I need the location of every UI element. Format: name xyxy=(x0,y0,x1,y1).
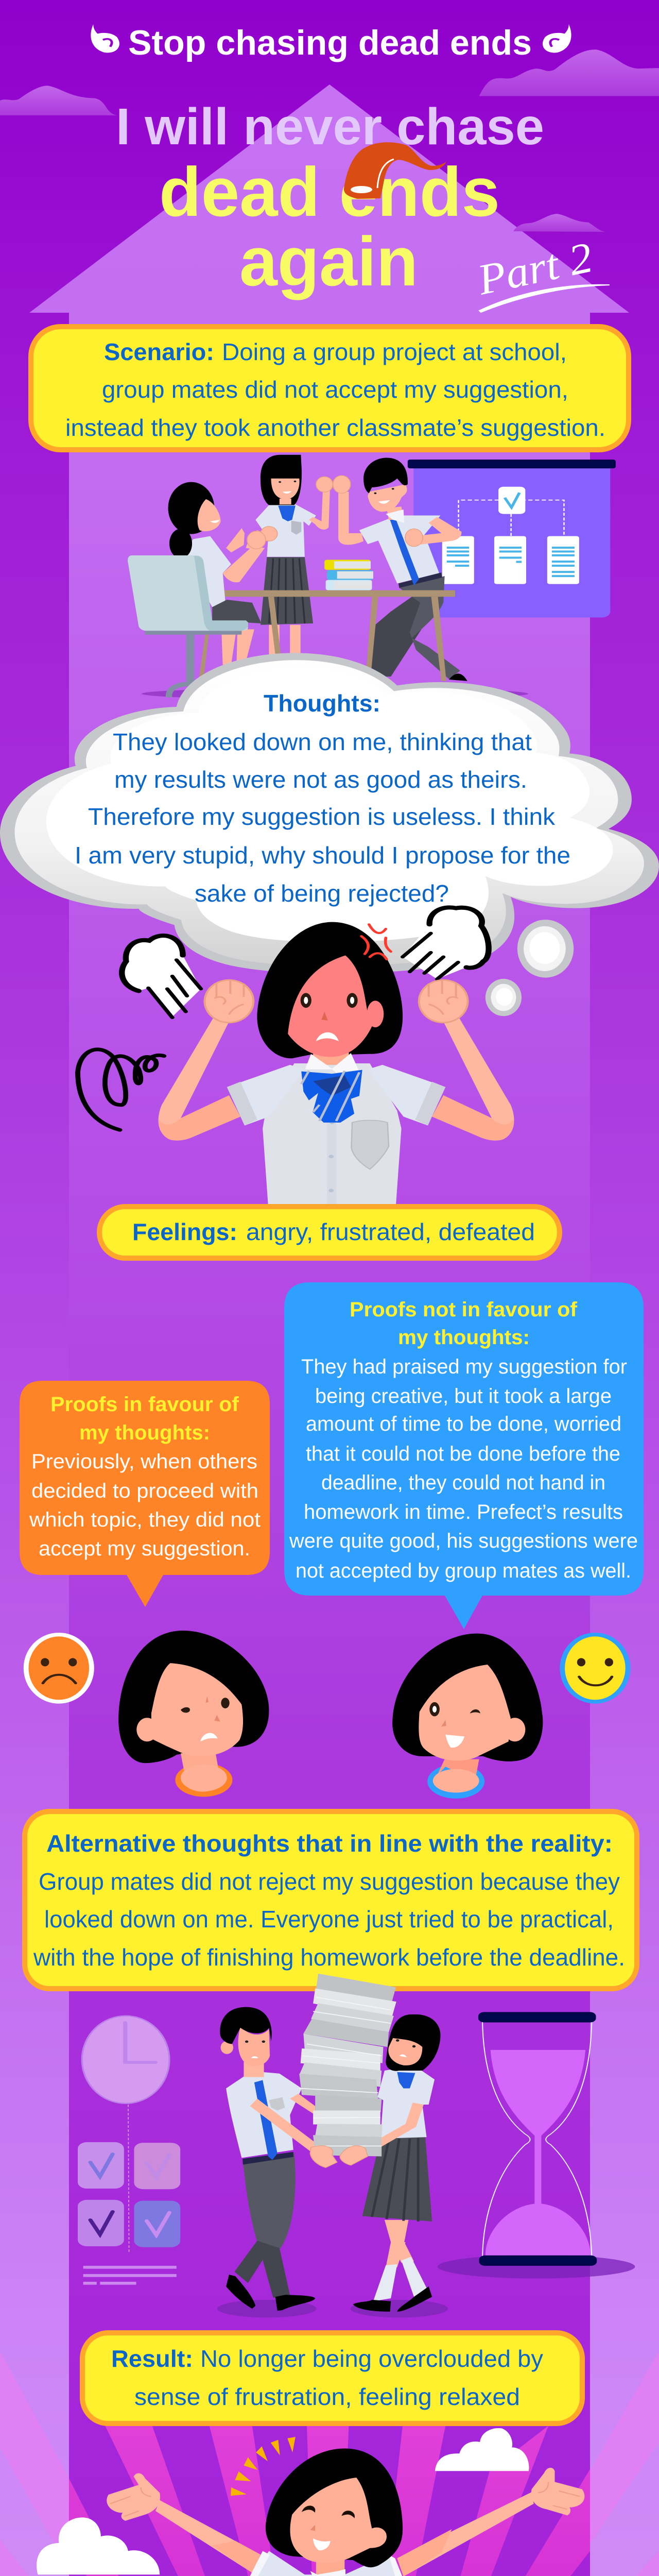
orange bubble text: my thoughts: xyxy=(79,1421,210,1444)
happy girl figure xyxy=(107,2449,584,2576)
thought bubbles xyxy=(485,920,574,1016)
blue bubble text: deadline, they could not hand in xyxy=(321,1471,605,1494)
presentation board xyxy=(408,460,616,617)
illustration: group discussion xyxy=(128,455,616,700)
blue bubble text: that it could not be done before the xyxy=(306,1443,620,1465)
alternative thoughts text: Group mates did not reject my suggestion because they xyxy=(39,1868,620,1895)
orange bubble text: Proofs in favour of xyxy=(50,1393,239,1416)
sun rays inside column xyxy=(69,2426,590,2576)
blue bubble text: amount of time to be done, worried xyxy=(306,1413,621,1435)
alternative thoughts text: Alternative thoughts that in line with the reality: xyxy=(46,1830,613,1857)
icon: left swirl xyxy=(91,24,119,53)
hands over paper stack xyxy=(310,2146,368,2167)
blue bubble text: being creative, but it took a large xyxy=(315,1385,612,1408)
blue bubble text: homework in time. Prefect’s results xyxy=(304,1501,623,1523)
boy xyxy=(333,458,467,681)
orange bubble text: decided to proceed with xyxy=(31,1480,258,1502)
girl carrying books xyxy=(340,2014,448,2317)
title: I will never chase dead ends again xyxy=(116,98,544,300)
callout: proofs not in favour xyxy=(284,1282,644,1629)
thoughts text: They looked down on me, thinking that xyxy=(113,728,532,755)
icon: black scribble xyxy=(78,1049,164,1130)
scenario box xyxy=(31,327,629,450)
icon: clock xyxy=(82,2016,169,2252)
thoughts text: my results were not as good as theirs. xyxy=(114,766,527,793)
blue bubble text: not accepted by group mates as well. xyxy=(296,1560,631,1582)
result text: Result: xyxy=(111,2345,193,2372)
orange bubble text: Previously, when others xyxy=(31,1450,257,1473)
thoughts text: sake of being rejected? xyxy=(195,880,449,907)
alternative thoughts text: with the hope of finishing homework before the deadline. xyxy=(33,1944,625,1971)
feelings box xyxy=(99,1207,560,1258)
paper stack xyxy=(299,1974,396,2156)
sad girl face xyxy=(118,1631,269,1797)
icon: hourglass xyxy=(438,2012,635,2279)
blue bubble text xyxy=(289,1298,638,1582)
white clouds xyxy=(37,2428,529,2574)
panel: feelings xyxy=(99,1207,560,1258)
icon: sparkle triangles xyxy=(231,2437,296,2496)
floor shadow xyxy=(142,688,528,700)
alternative thoughts box xyxy=(25,1811,637,1989)
feelings text: Feelings: xyxy=(132,1218,237,1245)
alternative thoughts text: looked down on me. Everyone just tried to be practical, xyxy=(44,1906,614,1933)
scenario text xyxy=(65,338,605,441)
illustration: carrying books, clock and hourglass xyxy=(78,1974,635,2317)
illustration: angry girl xyxy=(78,907,574,1206)
result text: No longer being overclouded by xyxy=(200,2345,543,2372)
orange bubble text: accept my suggestion. xyxy=(39,1537,250,1560)
icon: happy emoji xyxy=(560,1633,630,1704)
scenario text: instead they took another classmate’s suggestion. xyxy=(65,414,605,441)
blue speech bubble xyxy=(284,1282,644,1629)
orange speech bubble xyxy=(20,1381,270,1607)
icon: right steam puff xyxy=(403,907,489,979)
result scene background xyxy=(0,2351,659,2576)
scenario text: Scenario: xyxy=(104,338,214,365)
table and books xyxy=(224,560,455,681)
thoughts text: Therefore my suggestion is useless. I think xyxy=(88,803,556,830)
boy carrying books xyxy=(217,2007,337,2317)
thoughts text: I am very stupid, why should I propose for the xyxy=(75,842,570,869)
icon: checklist xyxy=(78,2142,180,2283)
blue bubble text: were quite good, his suggestions were xyxy=(289,1530,638,1552)
callout: proofs in favour xyxy=(20,1381,270,1607)
scenario text: Doing a group project at school, xyxy=(222,338,567,365)
title: I will never chase dead ends again: dead ends xyxy=(159,153,500,231)
panel: result xyxy=(82,2333,582,2424)
happy girl face xyxy=(392,1634,543,1799)
result box xyxy=(82,2333,582,2424)
title: I will never chase dead ends again: again xyxy=(239,223,418,300)
thoughts text xyxy=(75,690,570,907)
result text xyxy=(111,2345,543,2410)
alternative thoughts text xyxy=(33,1830,625,1971)
decorative purple clouds xyxy=(0,49,659,232)
orange bubble text: which topic, they did not xyxy=(29,1509,261,1531)
seated girl and chair xyxy=(128,482,266,697)
blue bubble text: They had praised my suggestion for xyxy=(301,1355,627,1378)
angry girl figure xyxy=(159,922,514,1206)
feelings text: angry, frustrated, defeated xyxy=(246,1218,535,1245)
scenario text: group mates did not accept my suggestion, xyxy=(102,376,568,403)
title: I will never chase dead ends again: I will never chase xyxy=(116,98,544,156)
part 2 handwritten tag: Part 2 xyxy=(473,233,597,304)
icon: right swirl xyxy=(543,24,571,53)
thought cloud xyxy=(0,653,659,974)
panel: scenario xyxy=(31,327,629,450)
orange bubble text xyxy=(29,1393,261,1560)
standing girl xyxy=(246,455,333,656)
heading: stop chasing dead ends: Stop chasing dead ends xyxy=(128,23,532,62)
sun rays outside column xyxy=(0,2351,659,2576)
icon: left steam puff xyxy=(122,936,201,1018)
icon: sad emoji xyxy=(24,1633,94,1704)
panel: alternative thoughts xyxy=(25,1811,637,1989)
blue bubble text: Proofs not in favour of xyxy=(350,1298,578,1321)
blue bubble text: my thoughts: xyxy=(398,1326,530,1349)
thoughts text: Thoughts: xyxy=(264,690,380,717)
result text: sense of frustration, feeling relaxed xyxy=(134,2383,520,2410)
faces and emoji row xyxy=(24,1631,630,1799)
feelings text xyxy=(132,1218,535,1245)
icon: orange hat on title xyxy=(344,142,446,199)
